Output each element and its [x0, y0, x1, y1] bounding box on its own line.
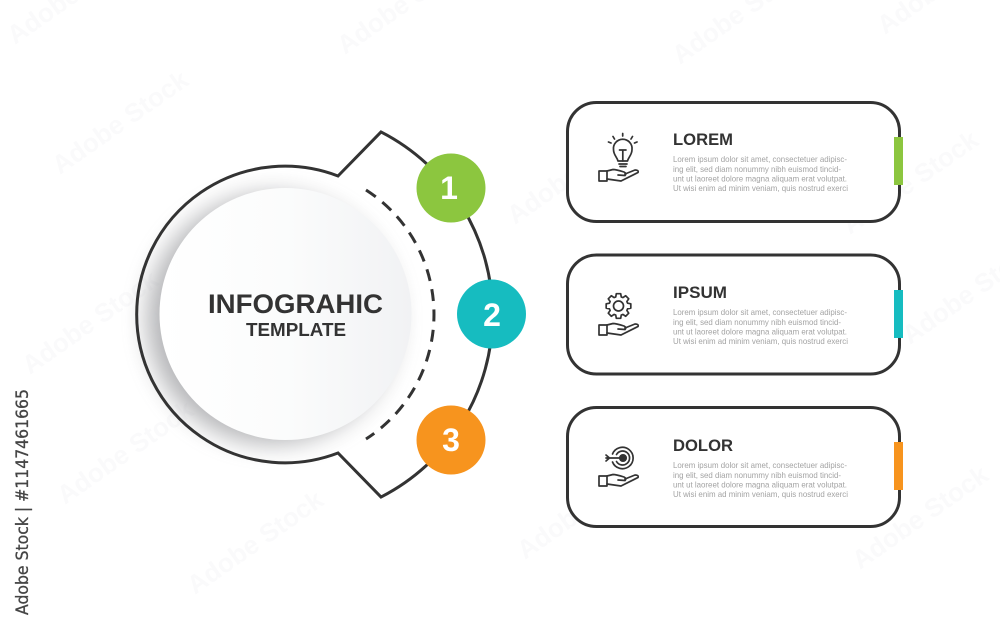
panel: central badge: [137, 132, 493, 497]
accent tab green: [894, 137, 903, 185]
watermark pattern: Adobe Stock: [51, 394, 199, 510]
body text: [673, 154, 848, 193]
heading: LOREM: [673, 131, 733, 149]
body text: unt ut laoreet dolore magna aliquam erat volutpat.: [673, 326, 847, 336]
number badge 3: 3: [442, 422, 460, 458]
dashed arc: [366, 190, 434, 439]
number badge 2: 2: [483, 297, 501, 333]
body text: unt ut laoreet dolore magna aliquam erat volutpat.: [673, 480, 847, 490]
body text: ing elit, sed diam nonummy nibh euismod tincid-: [673, 164, 841, 174]
body text: Lorem ipsum dolor sit amet, consectetuer adipisc-: [673, 154, 847, 164]
body text: Ut wisi enim ad minim veniam, quis nostrud exerci: [673, 336, 848, 346]
heading: DOLOR: [673, 437, 733, 455]
body text: Ut wisi enim ad minim veniam, quis nostrud exerci: [673, 183, 848, 193]
watermark pattern: Adobe Stock: [836, 124, 984, 240]
number badge 2: [457, 280, 526, 348]
watermark pattern: Adobe Stock: [511, 449, 659, 565]
heading: IPSUM: [673, 284, 727, 302]
number badge 1: 1: [440, 170, 458, 206]
title: INFOGRAHIC: [208, 289, 383, 319]
accent tab teal: [894, 290, 903, 338]
body text: [673, 460, 848, 499]
body text: unt ut laoreet dolore magna aliquam erat volutpat.: [673, 174, 847, 184]
body text: [673, 307, 848, 346]
watermark pattern: Adobe Stock: [181, 484, 329, 600]
watermark pattern: Adobe Stock: [846, 459, 994, 575]
body text: Lorem ipsum dolor sit amet, consectetuer adipisc-: [673, 307, 847, 317]
subtitle: TEMPLATE: [246, 320, 346, 340]
disc drop shadow: [147, 194, 397, 444]
body text: Ut wisi enim ad minim veniam, quis nostrud exerci: [673, 489, 848, 499]
watermark pattern: Adobe Stock: [16, 264, 164, 380]
panel: dolor card: [568, 408, 903, 526]
icon: gear on hand: [599, 294, 638, 335]
panel: ipsum card: [568, 255, 903, 374]
number badge 3: [416, 406, 486, 474]
icon: light bulb on hand: [599, 134, 638, 181]
body text: ing elit, sed diam nonummy nibh euismod tincid-: [673, 470, 841, 480]
watermark pattern: Adobe Stock: [46, 64, 194, 180]
body text: ing elit, sed diam nonummy nibh euismod tincid-: [673, 317, 841, 327]
number badge 1: [416, 154, 486, 222]
accent tab orange: [894, 442, 903, 490]
inner disc: [160, 188, 412, 440]
stock id label: Adobe Stock | #1147461665: [13, 389, 33, 615]
watermark pattern: Adobe Stock: [501, 114, 649, 230]
icon: target on hand: [599, 447, 638, 486]
badge outline: [137, 132, 493, 497]
panel: lorem card: [568, 102, 903, 222]
body text: Lorem ipsum dolor sit amet, consectetuer adipisc-: [673, 460, 847, 470]
